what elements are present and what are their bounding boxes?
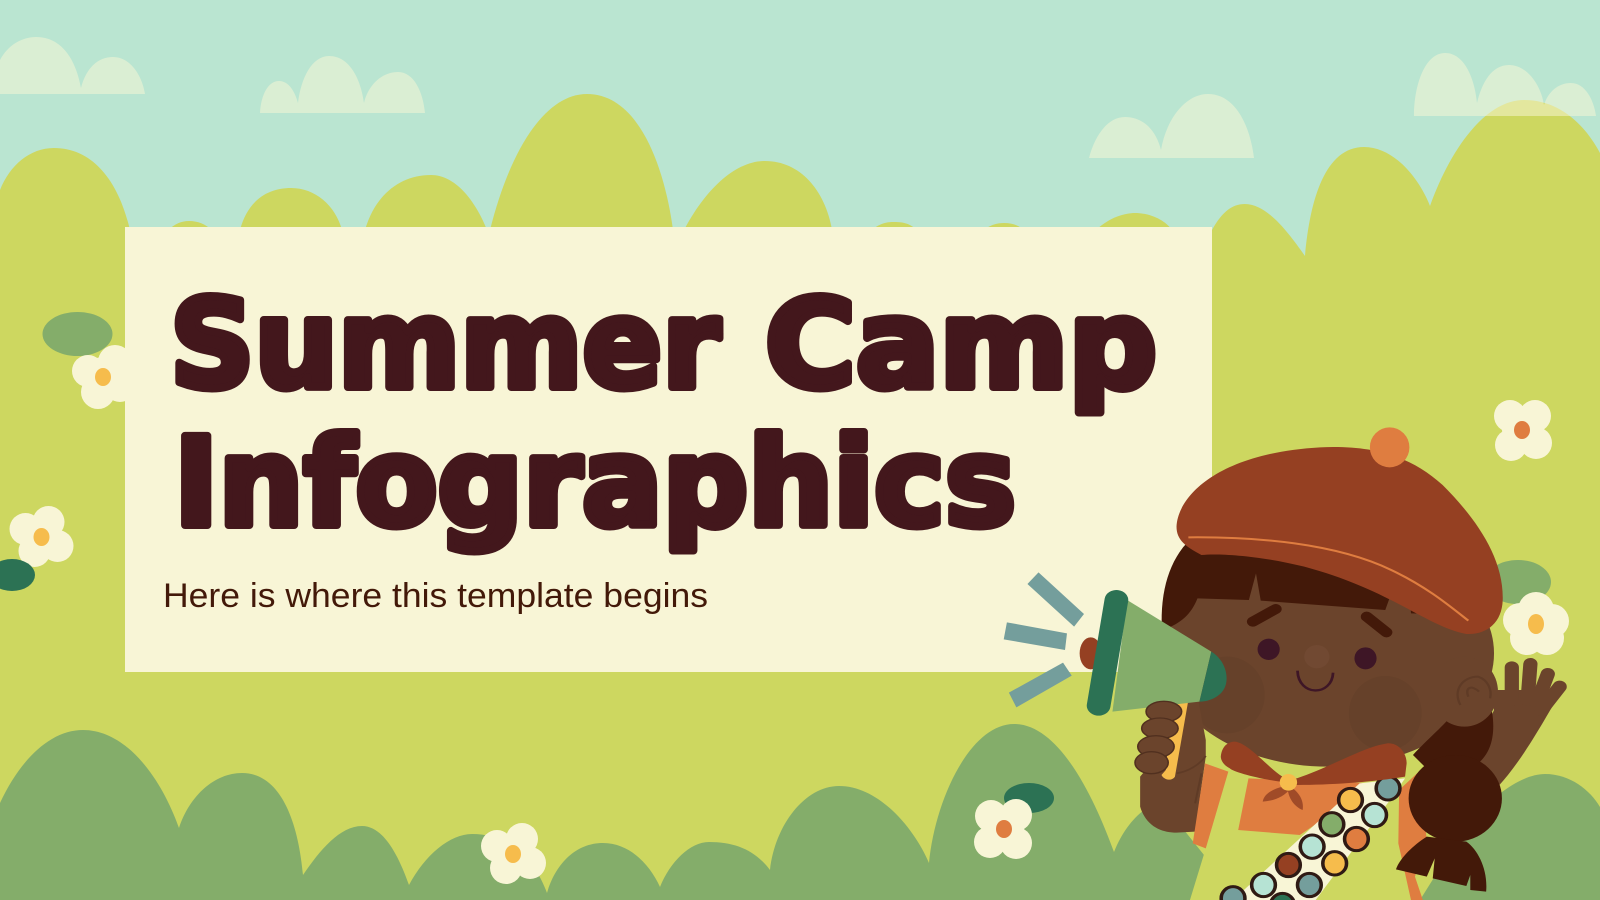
nose — [1304, 645, 1330, 668]
leaf and flower: left of panel — [42, 312, 136, 409]
subtitle: Here is where this template begins — [163, 577, 708, 615]
beret pompom — [1370, 427, 1409, 467]
leaf and flower: near megaphone — [974, 783, 1054, 859]
cheeks — [1190, 657, 1422, 751]
clouds — [0, 37, 1596, 158]
title: Infographics — [174, 412, 1016, 554]
neckerchief — [1221, 742, 1407, 810]
sound lines — [1004, 572, 1084, 707]
flower: top right — [1494, 400, 1552, 461]
flower and leaf: left edge — [0, 506, 74, 591]
title: Summer — [170, 274, 720, 416]
ear — [1431, 657, 1498, 727]
braid — [1396, 712, 1502, 892]
mouth — [1298, 671, 1333, 690]
beret stitch line — [1188, 537, 1468, 621]
beret — [1177, 447, 1503, 634]
badge sash — [1221, 777, 1405, 900]
megaphone — [1080, 600, 1227, 780]
foreground hills — [0, 724, 1600, 900]
waving arm and hand — [1470, 664, 1563, 787]
title: Camp — [765, 274, 1157, 416]
title panel — [125, 227, 1212, 672]
bangs — [1162, 543, 1433, 630]
back hair — [1162, 540, 1474, 655]
fist fingers — [1135, 701, 1182, 774]
holding arm — [1140, 700, 1206, 833]
flower: bottom centre — [481, 823, 546, 884]
body: shirt, straps and chest panel — [1190, 763, 1427, 900]
eyes — [1258, 639, 1377, 669]
leaf and flower: right of character — [1485, 560, 1569, 655]
character: camper girl with megaphone — [1004, 427, 1563, 900]
title — [170, 274, 1157, 554]
eyebrows — [1253, 609, 1386, 632]
face — [1162, 540, 1494, 767]
